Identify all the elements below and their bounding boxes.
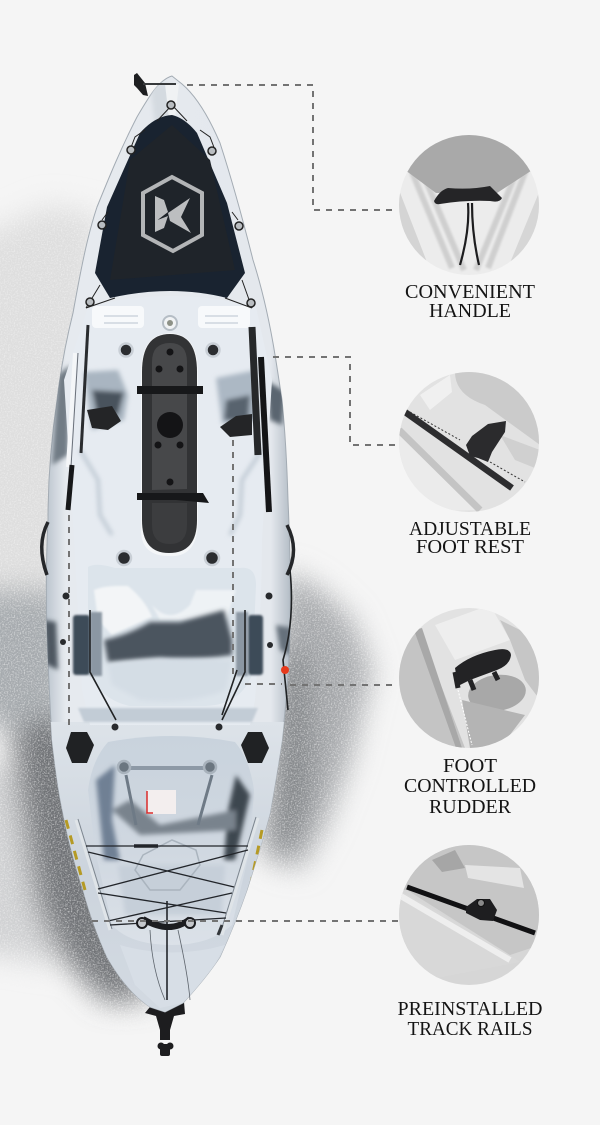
front deck — [64, 364, 272, 725]
leg wells shading — [80, 370, 262, 535]
feature: foot controlled rudder — [399, 605, 540, 818]
label: adjustable foot rest: FOOT REST — [416, 537, 524, 558]
seat bungee cords — [90, 570, 291, 720]
seat area — [88, 565, 256, 706]
label: convenient handle: CONVENIENT — [405, 282, 535, 303]
feature: adjustable foot rest — [399, 372, 540, 558]
straps — [137, 386, 203, 394]
red safety light — [281, 666, 289, 674]
kayak — [40, 73, 300, 1056]
label: convenient handle: HANDLE — [429, 301, 511, 322]
bow drain plug — [163, 316, 177, 330]
black mesh hatch net — [86, 101, 255, 308]
label: preinstalled track rails: TRACK RAILS — [408, 1019, 532, 1040]
ink smudge background — [0, 205, 372, 1002]
label sticker — [147, 790, 176, 814]
photo circle: handle — [399, 135, 539, 275]
dashed leader lines — [69, 85, 398, 921]
label: foot controlled rudder — [404, 756, 536, 818]
rudder fin at stern — [145, 1002, 185, 1056]
stern deck well — [88, 736, 254, 945]
stern bungee web — [86, 846, 248, 1000]
side carry handles — [42, 522, 293, 575]
scupper holes — [117, 344, 220, 565]
deck pad eyes — [60, 592, 273, 730]
label: adjustable foot rest: ADJUSTABLE — [409, 519, 531, 540]
stern scupper holes — [118, 761, 216, 773]
hull edge marbling — [44, 84, 292, 670]
label: convenient handle — [405, 282, 535, 322]
yellow stern decal left and right — [66, 820, 262, 893]
photo circle: foot rest — [399, 372, 540, 512]
front deck ridges — [92, 306, 250, 328]
label: foot controlled rudder: RUDDER — [429, 797, 511, 818]
flush rod holders — [66, 732, 269, 763]
stern tail shading — [183, 962, 216, 1003]
stern outer hull tone — [51, 722, 284, 1012]
seat side recesses — [73, 615, 263, 675]
feature: preinstalled track rails — [398, 845, 542, 1040]
seat floor band — [78, 708, 258, 722]
hexagon K logo — [143, 177, 202, 251]
photo circle: rudder — [399, 605, 540, 748]
net corner ropes and fittings — [86, 105, 252, 308]
label: preinstalled track rails — [398, 999, 542, 1040]
photo circle: track rails — [399, 845, 540, 985]
feature: convenient handle — [399, 135, 539, 317]
hull body — [46, 76, 290, 1012]
center accessory track plate — [137, 333, 209, 556]
label: preinstalled track rails: PREINSTALLED — [398, 999, 542, 1020]
stern carry handle — [137, 918, 195, 928]
foot pedals — [87, 406, 252, 437]
foot rest rails — [68, 325, 269, 512]
stern logo emboss — [135, 840, 200, 890]
bow front strip — [165, 84, 179, 118]
label: foot controlled rudder: CONTROLLED — [404, 776, 536, 797]
bow carry handle — [134, 73, 176, 96]
infographic canvas — [0, 73, 542, 1056]
stern side rails — [76, 817, 258, 935]
label: adjustable foot rest — [409, 519, 531, 558]
label: foot controlled rudder: FOOT — [443, 756, 497, 777]
